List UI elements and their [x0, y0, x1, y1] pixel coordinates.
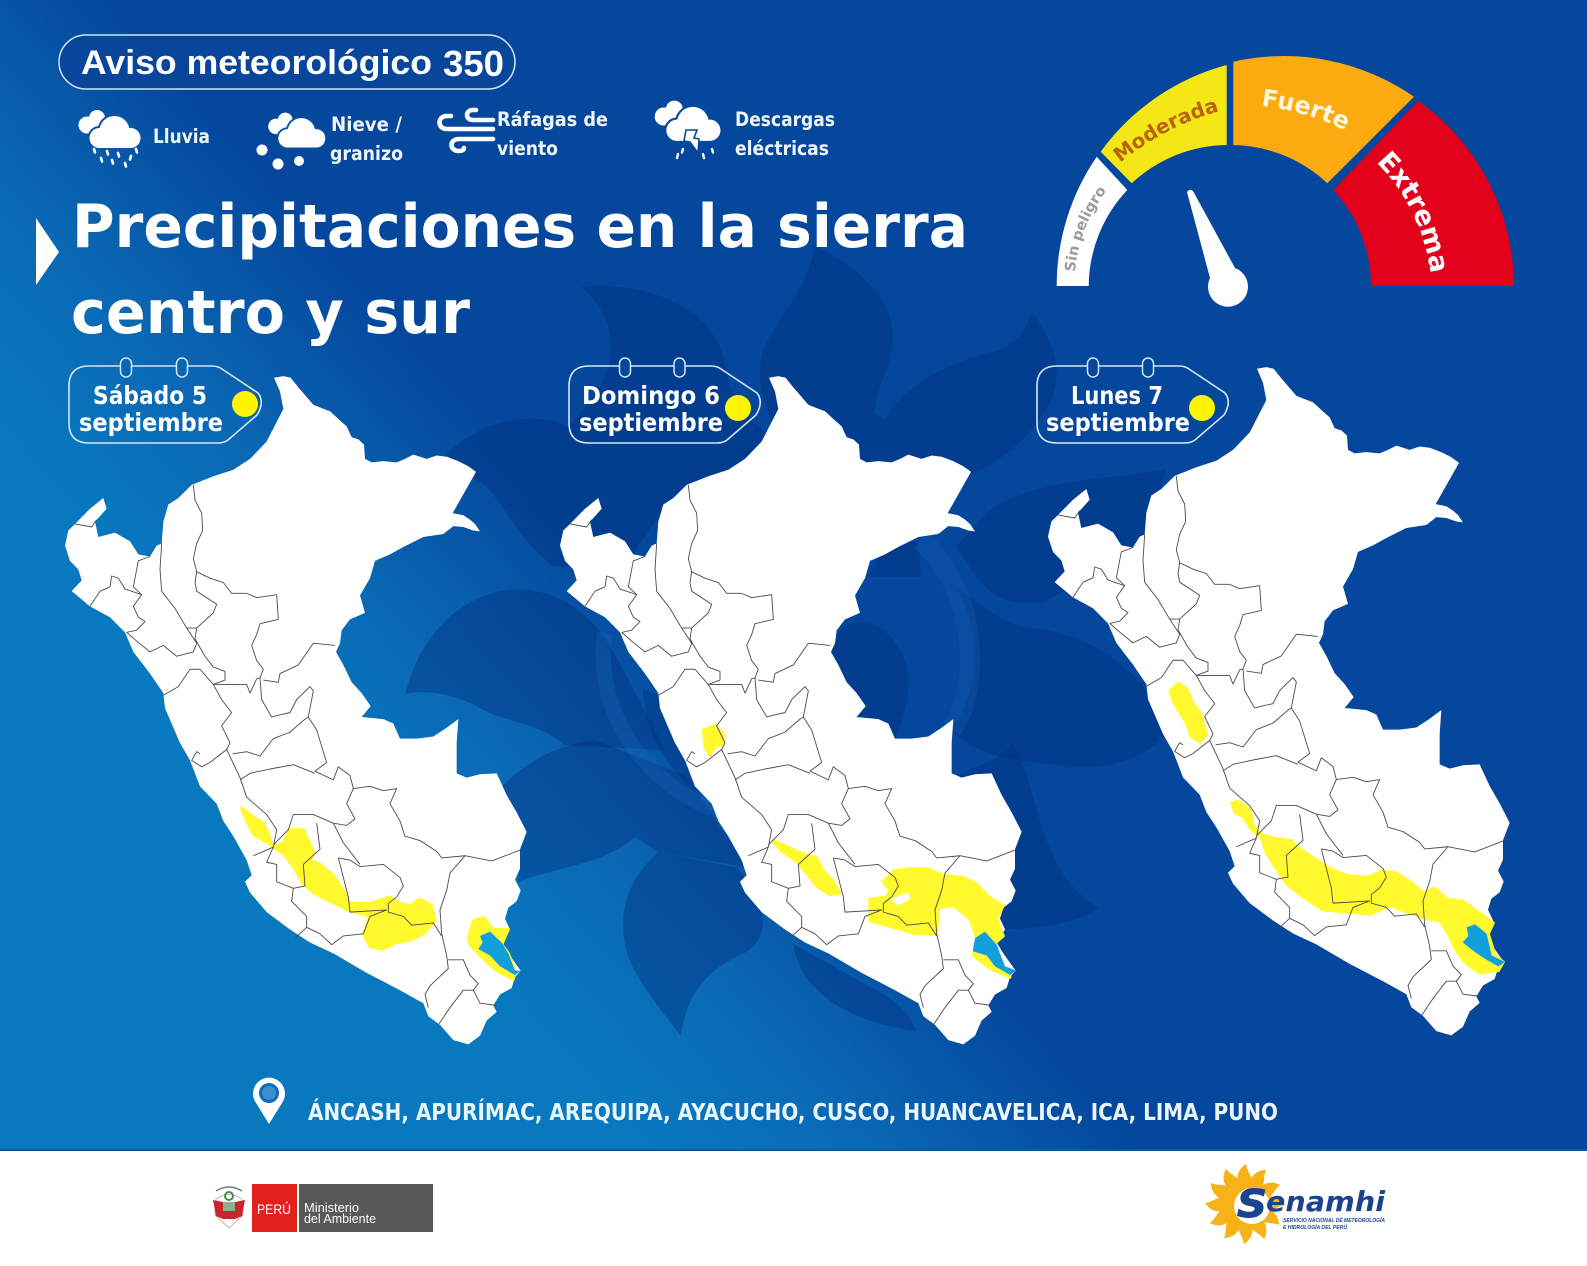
title — [71, 192, 968, 348]
logo: Senamhi: S — [1237, 1182, 1267, 1226]
icon: Senamhi sun — [1205, 1164, 1285, 1244]
location row — [253, 1078, 1278, 1126]
legend item: Lluvia: Lluvia — [153, 125, 210, 148]
logo: Ministerio del Ambiente: Ministerio — [304, 1200, 359, 1215]
severity dot — [1189, 395, 1215, 421]
warning areas Sábado — [242, 808, 521, 979]
icon: wind — [440, 110, 493, 151]
icon: lightning cloud — [655, 101, 722, 158]
title arrow — [36, 218, 59, 285]
date tag: Lunes 7 septiembre: Lunes 7 — [1071, 381, 1163, 410]
icon: snow cloud — [256, 113, 326, 170]
legend item: Lluvia — [78, 110, 210, 166]
logo: Senamhi: SERVICIO NACIONAL DE METEOROLOGÍA — [1283, 1217, 1385, 1224]
legend item: Ráfagas de viento — [440, 108, 608, 160]
gauge segment: Extrema — [1333, 101, 1514, 286]
map: Domingo 6 — [560, 376, 1022, 1044]
date tag: Lunes 7 septiembre — [1037, 358, 1228, 443]
warning areas Lunes — [1170, 683, 1505, 973]
gauge label: Sin peligro: Sin peligro — [1064, 188, 1105, 271]
background flower watermark — [406, 245, 1171, 1036]
icon: rain cloud — [78, 110, 142, 166]
date tag: Domingo 6 septiembre — [569, 358, 760, 443]
legend item: Descargas eléctricas: Descargas — [735, 108, 835, 131]
severity dot — [232, 391, 258, 417]
gauge segment: Sin peligro — [1057, 157, 1127, 286]
map: Sábado 5 — [65, 376, 527, 1044]
icon: location pin — [253, 1078, 285, 1124]
logo: Ministerio del Ambiente — [213, 1184, 433, 1232]
logo: Ministerio del Ambiente: PERÚ — [257, 1201, 291, 1217]
logo: Ministerio del Ambiente: del Ambiente — [304, 1211, 376, 1226]
date tag: Sábado 5 septiembre: Sábado 5 — [93, 381, 207, 410]
gauge label: Moderada: Moderada — [1112, 101, 1218, 162]
legend item: Ráfagas de viento: viento — [497, 137, 558, 160]
gauge label: Extrema: Extrema — [1378, 150, 1444, 272]
date tag: Sábado 5 septiembre — [69, 358, 261, 443]
footer band — [0, 1151, 1587, 1266]
title: Precipitaciones en la sierra — [72, 192, 968, 262]
legend item: Nieve / granizo: granizo — [330, 142, 403, 165]
map: Lunes 7 — [1048, 367, 1510, 1035]
date tag: Sábado 5 septiembre: septiembre — [79, 408, 223, 437]
warning areas Domingo — [703, 726, 1017, 977]
legend item: Nieve / granizo: Nieve / — [331, 113, 403, 136]
logo: Senamhi: enamhi — [1266, 1185, 1385, 1218]
legend item: Descargas eléctricas: eléctricas — [735, 137, 829, 160]
date tag: Domingo 6 septiembre: Domingo 6 — [582, 381, 720, 410]
icon: national shield — [213, 1187, 245, 1228]
logo: Senamhi: E HIDROLOGÍA DEL PERÚ — [1283, 1224, 1348, 1231]
severity gauge — [1056, 56, 1514, 307]
gauge segment: Fuerte — [1233, 56, 1414, 183]
logo: Senamhi — [1205, 1164, 1385, 1244]
title: centro y sur — [71, 278, 470, 348]
legend item: Ráfagas de viento: Ráfagas de — [497, 108, 608, 131]
gauge label: Fuerte: Fuerte — [1263, 88, 1348, 129]
severity dot — [725, 395, 751, 421]
header pill: Aviso meteorológico 350 — [59, 35, 515, 89]
date tag: Lunes 7 septiembre: septiembre — [1046, 408, 1190, 437]
header pill: Aviso meteorológico 350: Aviso meteorológico — [81, 44, 432, 82]
date tag: Domingo 6 septiembre: septiembre — [579, 408, 723, 437]
legend item: Descargas eléctricas — [655, 101, 835, 160]
location row: ÁNCASH, APURÍMAC, AREQUIPA, AYACUCHO, CUSCO, HUANCAVELICA, ICA, LIMA, PUNO — [308, 1098, 1278, 1126]
legend item: Nieve / granizo — [256, 113, 403, 170]
gauge needle — [1187, 190, 1248, 307]
header pill: Aviso meteorológico 350: 350 — [443, 43, 504, 84]
gauge segment: Moderada — [1101, 65, 1227, 183]
